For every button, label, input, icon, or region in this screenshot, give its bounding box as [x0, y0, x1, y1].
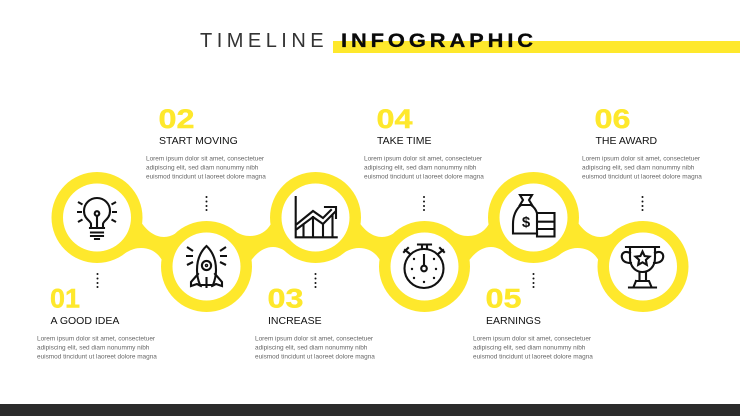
icon: money bag and stack: $ — [522, 214, 531, 231]
step 03 text: adipiscing elit, sed diam nonummy nibh — [255, 344, 368, 352]
step 02 text: adipiscing elit, sed diam nonummy nibh — [146, 164, 259, 172]
step 03 text — [255, 284, 375, 360]
step 02 text: euismod tincidunt ut laoreet dolore magna — [146, 174, 266, 180]
timeline ribbon — [52, 172, 688, 312]
step 05 text — [473, 284, 593, 360]
step 02 text: Lorem ipsum dolor sit amet, consectetuer — [146, 156, 265, 162]
icon: growth chart — [296, 197, 337, 237]
ribbon inner white circles — [63, 184, 677, 300]
step 01 text: adipiscing elit, sed diam nonummy nibh — [37, 344, 150, 352]
title — [200, 30, 537, 52]
icon: stopwatch — [404, 244, 444, 288]
dotted connector 5 — [532, 273, 534, 288]
step 04 text: TAKE TIME — [377, 135, 431, 147]
icon: trophy — [622, 247, 663, 288]
step 02 text: START MOVING — [159, 135, 238, 147]
icon: money bag and stack — [513, 195, 554, 236]
step 05 text: Lorem ipsum dolor sit amet, consectetuer — [473, 336, 592, 342]
step 04 text — [364, 104, 484, 180]
step 01 text: Lorem ipsum dolor sit amet, consectetuer — [37, 336, 156, 342]
step 06 text: adipiscing elit, sed diam nonummy nibh — [582, 164, 695, 172]
icon: light bulb — [77, 198, 117, 239]
step 05 text: EARNINGS — [486, 315, 541, 327]
step 01 text: 01 — [50, 284, 80, 314]
step 05 text: euismod tincidunt ut laoreet dolore magna — [473, 354, 593, 360]
title highlight bar — [333, 41, 740, 53]
step 03 text: Lorem ipsum dolor sit amet, consectetuer — [255, 336, 374, 342]
step 03 text: INCREASE — [268, 315, 322, 327]
step 04 text: Lorem ipsum dolor sit amet, consectetuer — [364, 156, 483, 162]
icon: rocket — [186, 246, 227, 287]
step 05 text: adipiscing elit, sed diam nonummy nibh — [473, 344, 586, 352]
dotted connector 1 — [96, 273, 98, 288]
step 01 text — [37, 284, 157, 360]
dotted connector 2 — [206, 196, 208, 211]
title: INFOGRAPHIC — [341, 31, 537, 52]
step 06 text: Lorem ipsum dolor sit amet, consectetuer — [582, 156, 701, 162]
bottom dark band — [0, 404, 740, 416]
step 04 text: adipiscing elit, sed diam nonummy nibh — [364, 164, 477, 172]
dotted connector 6 — [642, 196, 644, 211]
step 06 text: 06 — [594, 104, 630, 134]
step 06 text: THE AWARD — [596, 135, 658, 147]
step 01 text: A GOOD IDEA — [50, 315, 119, 327]
step 03 text: 03 — [268, 284, 304, 314]
dotted connector 3 — [314, 273, 316, 288]
title: TIMELINE — [200, 30, 327, 52]
dotted connector 4 — [423, 196, 425, 211]
step 03 text: euismod tincidunt ut laoreet dolore magna — [255, 354, 375, 360]
step 06 text — [582, 104, 702, 180]
step 04 text: 04 — [376, 104, 412, 134]
step 06 text: euismod tincidunt ut laoreet dolore magna — [582, 174, 702, 180]
step 02 text: 02 — [158, 104, 194, 134]
step 02 text — [146, 104, 266, 180]
step 04 text: euismod tincidunt ut laoreet dolore magna — [364, 174, 484, 180]
step 05 text: 05 — [486, 284, 522, 314]
step 01 text: euismod tincidunt ut laoreet dolore magna — [37, 354, 157, 360]
